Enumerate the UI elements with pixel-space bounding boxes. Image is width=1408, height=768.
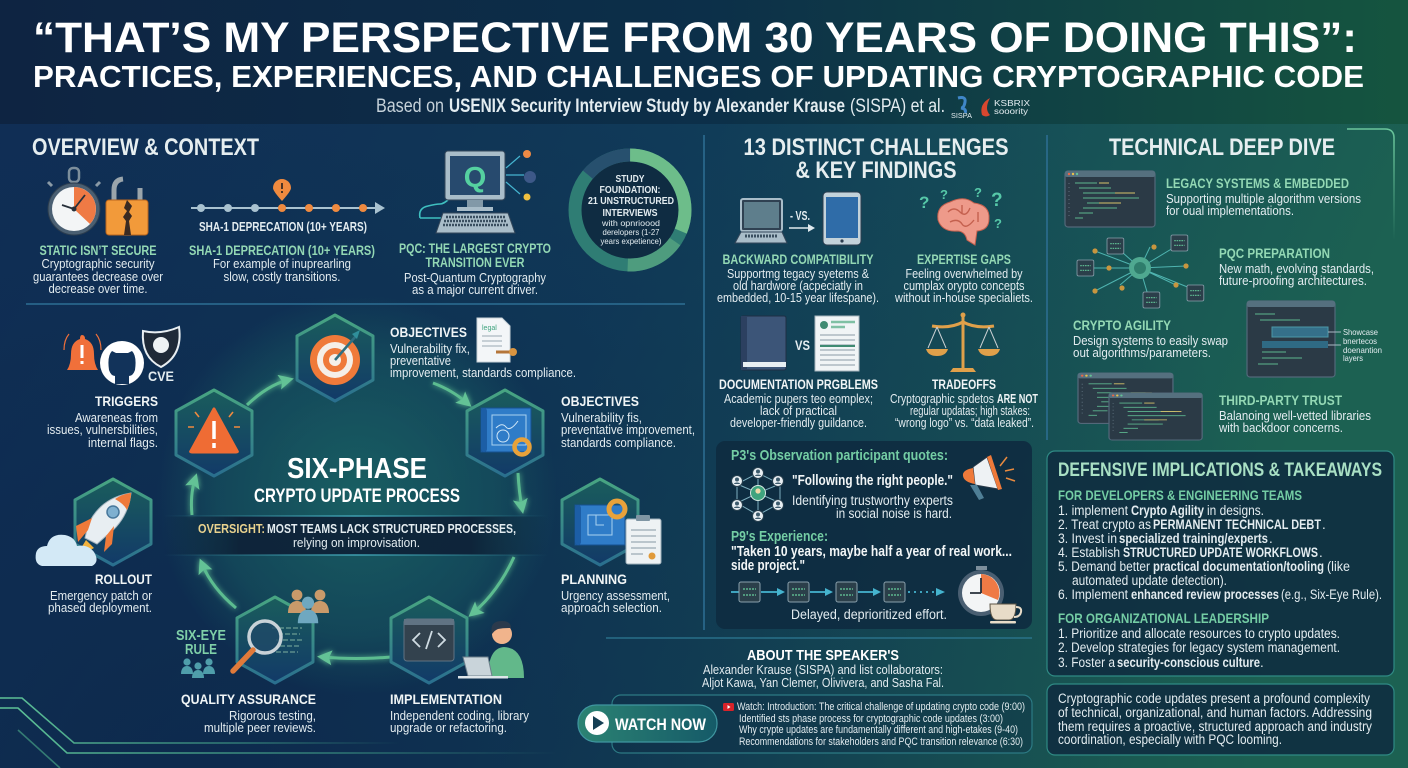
subtitle: Based on <box>376 96 444 117</box>
list: leadership: . <box>1260 655 1264 670</box>
quote: following the right people: in social noise is hard. <box>836 506 952 521</box>
phase: objectives blueprint: preventative improvement, <box>561 423 695 437</box>
item: crypto agility: layers <box>1343 353 1363 363</box>
list: developers: . <box>1322 517 1326 532</box>
text: static isn't secure <box>33 243 163 296</box>
panel: defensive implications <box>1047 451 1394 676</box>
phase: triggers: Awareneas from <box>75 411 158 425</box>
item: crypto agility: doenantion <box>1343 345 1382 355</box>
phase: objectives target: Vulnerability fix, <box>390 342 470 356</box>
arrows: process cycle <box>191 380 522 658</box>
list: developers: 1. implement <box>1058 503 1128 518</box>
list: developers: FOR DEVELOPERS & ENGINEERING TEAMS <box>1058 487 1302 503</box>
text: pqc transition <box>399 241 551 297</box>
callout: oversight: relying on improvisation. <box>293 536 420 550</box>
item: crypto agility: Design systems to easily swap <box>1073 334 1228 348</box>
item: pqc preparation: PQC PREPARATION <box>1219 246 1330 261</box>
item: legacy systems: Supporting multiple algorithm versions <box>1166 192 1361 206</box>
text: static isn't secure: decrease over time. <box>48 282 148 296</box>
callout: oversight: MOST TEAMS LACK STRUCTURED PROCESSES, <box>267 521 516 536</box>
icon: quantum computer: Q <box>464 162 486 194</box>
list: leadership: 3. Foster a <box>1058 655 1115 670</box>
challenge: tradeoffs: regular updatas; high stakes: <box>910 404 1030 418</box>
chart: study foundation donut: 21 UNSTRUCTURED <box>588 195 674 207</box>
list: leadership: security-conscious culture <box>1117 655 1260 670</box>
phase: objectives blueprint: standards compliance. <box>561 436 676 450</box>
item: pqc preparation: New math, evolving standards, <box>1219 262 1374 276</box>
list: developers: . <box>1319 545 1323 560</box>
title: “THAT’S MY PERSPECTIVE FROM 30 YEARS OF DOING THIS”: <box>33 14 1357 62</box>
diagram: delayed effort chain <box>731 582 947 622</box>
text: sha-1 deprecation <box>189 243 375 284</box>
quote: following the right people <box>792 472 953 521</box>
phase: planning: Urgency assessment, <box>561 589 670 603</box>
challenge: tradeoffs: Cryptographic spdetos <box>890 392 994 406</box>
text: static isn't secure: STATIC ISN’T SECURE <box>40 243 156 258</box>
phase: planning: PLANNING <box>561 571 627 587</box>
challenge: expertise gaps: EXPERTISE GAPS <box>917 252 1011 267</box>
header <box>33 14 1364 120</box>
text: sha-1 deprecation: SHA-1 DEPRECATION (10+ YEARS) <box>189 243 375 258</box>
heading: challenges <box>744 134 1008 184</box>
subtitle: (SISPA) et al. <box>850 96 945 117</box>
center title: SIX-PHASE <box>287 453 427 485</box>
item: third-party trust: Balanoing well-vetted libraries <box>1219 409 1371 423</box>
phase: rollout: Emergency patch or <box>50 589 152 603</box>
list: developers: (e.g., Six-Eye Rule). <box>1281 587 1382 602</box>
challenge: expertise gaps: ? <box>991 190 1003 211</box>
panel: conclusion: of technical, organizational, and human factors. Addressing <box>1058 705 1372 720</box>
button: watch now: WATCH NOW <box>615 715 707 734</box>
phase: implementation: upgrade or refactoring. <box>390 721 507 735</box>
phase: implementation: IMPLEMENTATION <box>390 691 502 707</box>
list: developers: . <box>1269 531 1273 546</box>
text: video chapters: Watch: Introduction: The critical challenge of updating crypto code (9:00) <box>737 701 1025 713</box>
challenge: expertise gaps: ? <box>994 216 1002 231</box>
chart: study foundation donut <box>553 133 707 287</box>
callout: oversight <box>163 516 548 555</box>
phase: quality assurance: Rigorous testing, <box>229 709 316 723</box>
heading: p3 observation: P3's Observation participant quotes: <box>731 447 948 464</box>
phase: rollout: ROLLOUT <box>95 571 152 587</box>
icon: stopwatch and broken lock <box>48 168 148 235</box>
challenge: tradeoffs: “wrong logo” vs. “data leaked”. <box>895 416 1034 430</box>
logos: SISPA <box>951 111 972 120</box>
list: developers: 6. Implement <box>1058 587 1128 602</box>
logos: KSBRIX <box>994 99 1031 108</box>
list: developers <box>1058 487 1382 602</box>
item: crypto agility: bnertecos <box>1343 336 1377 346</box>
challenge: tradeoffs: ARE NOT <box>997 392 1038 406</box>
challenge: backward compatibility: old hardwore (acpeciatly in <box>733 279 863 293</box>
panel: six-phase process <box>36 315 695 735</box>
panel: technical deep dive <box>1065 134 1382 440</box>
icon: video play <box>723 703 734 711</box>
phase: objectives target: legal <box>482 325 497 332</box>
phase: rollout: phased deployment. <box>48 601 152 615</box>
panel: about the speakers <box>702 647 944 690</box>
timeline: sha-1 deprecation: SHA-1 DEPRECATION (10+ YEARS) <box>199 219 367 234</box>
quote: following the right people: "Following the right people." <box>792 472 953 489</box>
challenge: backward compatibility: Supportmg tegacy syetems & <box>727 267 870 281</box>
challenge: tradeoffs <box>890 312 1038 430</box>
text: speaker names: Aljot Kawa, Yan Clemer, Olivivera, and Sasha Fal. <box>702 675 944 690</box>
text: pqc transition: TRANSITION EVER <box>426 255 525 270</box>
item: crypto agility: Showcase <box>1343 327 1378 337</box>
phase: objectives target <box>297 315 576 401</box>
list: developers: PERMANENT TECHNICAL DEBT <box>1153 517 1322 532</box>
challenge: expertise gaps: Feeling overwhelmed by <box>906 267 1023 281</box>
quote: p9 experience <box>731 529 1012 574</box>
quote: p9 experience: "Taken 10 years, maybe half a year of real work... <box>731 544 1012 560</box>
challenge: backward compatibility: - VS. <box>790 208 810 223</box>
list: developers: STRUCTURED UPDATE WORKFLOWS <box>1123 545 1318 560</box>
text: sha-1 deprecation: For example of inuprearling <box>213 257 351 271</box>
phase: planning: approach selection. <box>561 601 662 615</box>
phase: quality assurance: SIX-EYE <box>176 627 226 644</box>
phase: objectives target: improvement, standards compliance. <box>390 366 576 380</box>
item: crypto agility: out algorithms/parameters. <box>1073 346 1211 360</box>
list: leadership: FOR ORGANIZATIONAL LEADERSHIP <box>1058 610 1269 626</box>
challenge: documentation problems: developer-friendly guildance. <box>730 416 867 430</box>
challenge: backward compatibility <box>717 192 879 305</box>
heading: about: ABOUT THE SPEAKER'S <box>747 647 899 664</box>
phase: objectives blueprint: Vulnerability fis, <box>561 411 642 425</box>
list: developers: specialized training/experts <box>1119 531 1268 546</box>
chart: study foundation donut: STUDY <box>616 173 644 185</box>
logos: soooritу <box>994 107 1028 116</box>
phase: objectives blueprint <box>467 390 695 476</box>
list: developers: 4. Establish <box>1058 545 1120 560</box>
item: legacy systems <box>1065 171 1361 227</box>
list: developers: (like <box>1327 559 1350 574</box>
logos <box>951 98 1031 120</box>
panel: overview and context <box>32 133 707 297</box>
timeline: sha-1 deprecation <box>191 179 385 234</box>
item: third-party trust: THIRD-PARTY TRUST <box>1219 393 1343 408</box>
phase: quality assurance <box>176 590 329 735</box>
list: leadership: 1. Prioritize and allocate resources to crypto updates. <box>1058 626 1340 641</box>
chart: study foundation donut: INTERVIEWS <box>602 207 658 219</box>
text: video chapters: Identified sts phase process for cryptographic code updates (3:00) <box>739 713 1003 725</box>
list: developers: in designs. <box>1207 503 1264 518</box>
item: crypto agility <box>1073 301 1382 377</box>
chart: study foundation donut: derelopers (1-27 <box>602 227 660 237</box>
item: crypto agility: CRYPTO AGILITY <box>1073 318 1171 333</box>
panel: conclusion: them requires a proactive, structured approach and industry <box>1058 719 1372 734</box>
quote: p9 experience: P9's Experience: <box>731 529 828 545</box>
chart: study foundation donut: years expetience) <box>600 236 662 246</box>
challenge: expertise gaps: cumplax orypto concepts <box>904 279 1024 293</box>
phase: objectives target: OBJECTIVES <box>390 324 467 340</box>
panel: challenges and key findings <box>717 134 1038 430</box>
title <box>33 14 1364 94</box>
diagram: delayed effort chain: Delayed, deprioritized effort. <box>791 607 947 622</box>
list: developers: enhanced review processes <box>1131 587 1279 602</box>
item: legacy systems: LEGACY SYSTEMS & EMBEDDED <box>1166 176 1349 191</box>
list: developers: practical documentation/tooling <box>1153 559 1324 574</box>
button: watch now <box>578 705 717 742</box>
list: developers: 3. Invest in <box>1058 531 1117 546</box>
text: speaker names: Alexander Krause (SISPA) and list collaborators: <box>703 662 943 677</box>
challenge: expertise gaps: ? <box>974 185 982 200</box>
heading: technical: TECHNICAL DEEP DIVE <box>1109 134 1335 161</box>
heading: overview: OVERVIEW & CONTEXT <box>32 134 259 161</box>
text: video chapters: Why crypte updates are fundamentally different and high-etakes (9-40) <box>739 724 1018 736</box>
text: pqc transition: as a major current driver. <box>412 283 538 297</box>
phase: triggers: CVE <box>148 368 174 384</box>
challenge: documentation problems: VS <box>795 337 810 353</box>
phase: rollout <box>36 479 152 615</box>
subtitle <box>376 96 945 117</box>
phase: implementation <box>390 597 530 735</box>
list: leadership: 2. Develop strategies for legacy system management. <box>1058 640 1340 655</box>
list: developers: 5. Demand better <box>1058 559 1150 574</box>
text: static isn't secure: guarantees decrease over <box>33 270 163 284</box>
list: developers: 2. Treat crypto as <box>1058 517 1151 532</box>
challenge: tradeoffs: TRADEOFFS <box>932 377 996 392</box>
subtitle: Alexander Krause <box>715 96 845 117</box>
panel: participant quotes <box>716 441 1032 629</box>
panel: conclusion: coordination, especially with PQC looming. <box>1058 732 1282 747</box>
phase: objectives target: preventative <box>390 354 451 368</box>
icon: stopwatch and coffee <box>958 566 1021 624</box>
phase: quality assurance: QUALITY ASSURANCE <box>181 691 316 707</box>
panel: watch now <box>578 695 1032 753</box>
challenge: documentation problems: Academic pupers teo eomplex; <box>724 392 873 406</box>
list: leadership <box>1058 610 1340 670</box>
text: speaker names <box>702 662 944 690</box>
phase: implementation: Independent coding, library <box>390 709 530 723</box>
text: pqc transition: Post-Quantum Cryptography <box>404 271 547 285</box>
list: developers: automated update detection). <box>1072 573 1227 588</box>
challenge: expertise gaps: ? <box>919 193 929 212</box>
item: third-party trust: with backdoor concerns. <box>1218 421 1343 435</box>
challenge: expertise gaps: without in-house specialiets. <box>894 291 1033 305</box>
text: pqc transition: PQC: THE LARGEST CRYPTO <box>399 241 551 256</box>
item: legacy systems: for oual implementations. <box>1166 204 1294 218</box>
heading: challenges: & KEY FINDINGS <box>796 157 956 184</box>
heading: challenges: 13 DISTINCT CHALLENGES <box>744 134 1008 161</box>
phase: planning <box>561 479 670 615</box>
challenge: documentation problems: lack of practical <box>760 404 837 418</box>
callout: oversight: OVERSIGHT: <box>198 521 265 536</box>
phase: quality assurance: multiple peer reviews. <box>204 721 316 735</box>
chart: study foundation donut: FOUNDATION: <box>600 184 660 196</box>
text: static isn't secure: Cryptographic security <box>42 257 155 271</box>
phase: triggers: issues, vulnersbilities, <box>47 423 158 437</box>
panel: conclusion: Cryptographic code updates present a profound complexity <box>1058 691 1370 706</box>
center title: CRYPTO UPDATE PROCESS <box>254 486 460 507</box>
text: video chapters: Recommendations for stakeholders and PQC transition relevance (6:30) <box>739 736 1023 748</box>
text: video chapters <box>737 701 1025 748</box>
challenge: documentation problems <box>719 316 878 430</box>
quote: p9 experience: side project." <box>731 558 805 574</box>
icon: quantum computer <box>420 150 536 233</box>
list: developers: Crypto Agility <box>1131 503 1204 518</box>
item: third-party trust <box>1078 373 1371 440</box>
quote: following the right people: Identifying trustworthy experts <box>792 493 953 508</box>
challenge: documentation problems: DOCUMENTATION PRGBLEMS <box>719 377 878 392</box>
item: pqc preparation: future-proofing architectures. <box>1219 274 1367 288</box>
chart: study foundation donut: with opnrioood <box>601 218 660 228</box>
phase: objectives blueprint: OBJECTIVES <box>561 393 639 409</box>
icon: people network <box>732 468 784 522</box>
center title <box>254 453 460 507</box>
phase: triggers: TRIGGERS <box>95 393 158 409</box>
title: PRACTICES, EXPERIENCES, AND CHALLENGES OF UPDATING CRYPTOGRAPHIC CODE <box>33 59 1364 94</box>
phase: triggers: internal flags. <box>88 436 158 450</box>
challenge: expertise gaps: ? <box>940 187 948 202</box>
challenge: backward compatibility: BACKWARD COMPATIBILITY <box>722 252 874 267</box>
item: pqc preparation <box>1077 235 1374 308</box>
subtitle: USENIX Security Interview Study by <box>449 96 711 117</box>
panel: conclusion <box>1047 684 1394 755</box>
challenge: backward compatibility: embedded, 10-15 year lifespane). <box>717 291 879 305</box>
phase: triggers <box>47 327 252 476</box>
phase: quality assurance: RULE <box>185 641 217 658</box>
icon: megaphone <box>963 455 1015 500</box>
text: sha-1 deprecation: slow, costly transitions. <box>224 270 340 284</box>
challenge: expertise gaps <box>894 185 1033 305</box>
